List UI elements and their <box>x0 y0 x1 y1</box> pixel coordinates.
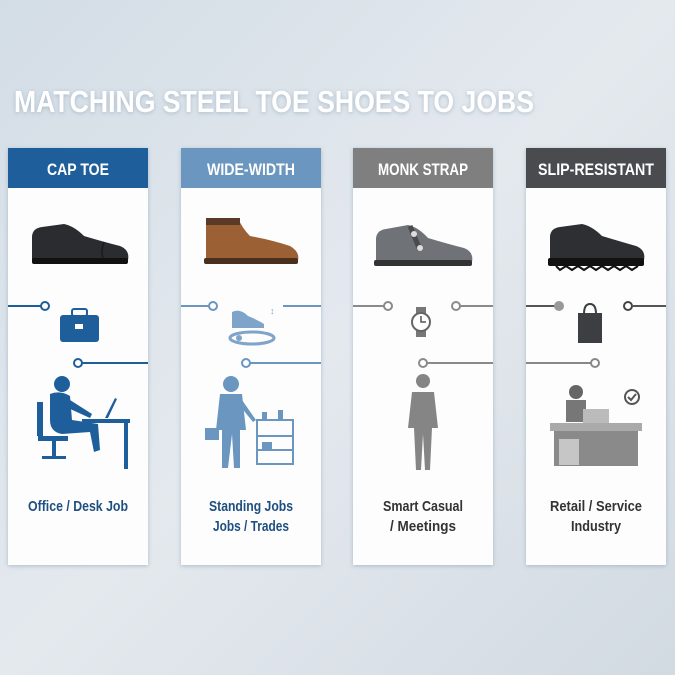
icon: shopping bag <box>578 304 602 343</box>
panel: slip-resistant <box>526 148 666 565</box>
icon: clerk at counter <box>550 385 642 466</box>
panel: wide-width: Jobs / Trades <box>213 518 289 535</box>
label: standing jobs: Standing Jobs <box>209 498 293 515</box>
icon: black rugged shoe <box>548 224 644 270</box>
header: cap toe <box>8 148 148 188</box>
header: wide-width: WIDE-WIDTH <box>207 160 295 179</box>
header: monk strap: MONK STRAP <box>378 160 468 179</box>
connector lines <box>8 302 148 367</box>
header: wide-width <box>181 148 321 188</box>
header: slip-resistant <box>526 148 666 188</box>
panel: cap toe <box>8 148 148 565</box>
icon: briefcase <box>60 309 99 342</box>
panel: slip-resistant: Industry <box>571 518 622 535</box>
icon: standing man <box>408 374 438 470</box>
title: MATCHING STEEL TOE SHOES TO JOBS <box>14 84 534 119</box>
header: cap toe: CAP TOE <box>47 160 109 179</box>
icon: wide shoe & insole: ↕ <box>270 306 274 316</box>
connector lines <box>526 302 666 367</box>
panel: monk strap <box>353 148 493 565</box>
connector lines <box>181 302 321 367</box>
label: office: Office / Desk Job <box>28 498 128 515</box>
label: smart casual: Smart Casual <box>383 498 463 515</box>
icon: brown boot <box>204 218 298 264</box>
connector lines <box>353 302 493 367</box>
label: retail: Retail / Service <box>550 498 642 515</box>
icon: worker with cart <box>205 376 293 468</box>
panel: monk strap: / Meetings <box>390 518 456 535</box>
icon: person at desk <box>37 376 130 469</box>
panel: wide-width <box>181 148 321 565</box>
header: monk strap <box>353 148 493 188</box>
header: slip-resistant: SLIP-RESISTANT <box>538 160 655 179</box>
icon: grey monk strap shoe <box>374 225 472 266</box>
icon: watch <box>412 307 430 337</box>
icon: black cap toe shoe <box>32 224 128 264</box>
icon: wide shoe & insole <box>230 306 274 344</box>
